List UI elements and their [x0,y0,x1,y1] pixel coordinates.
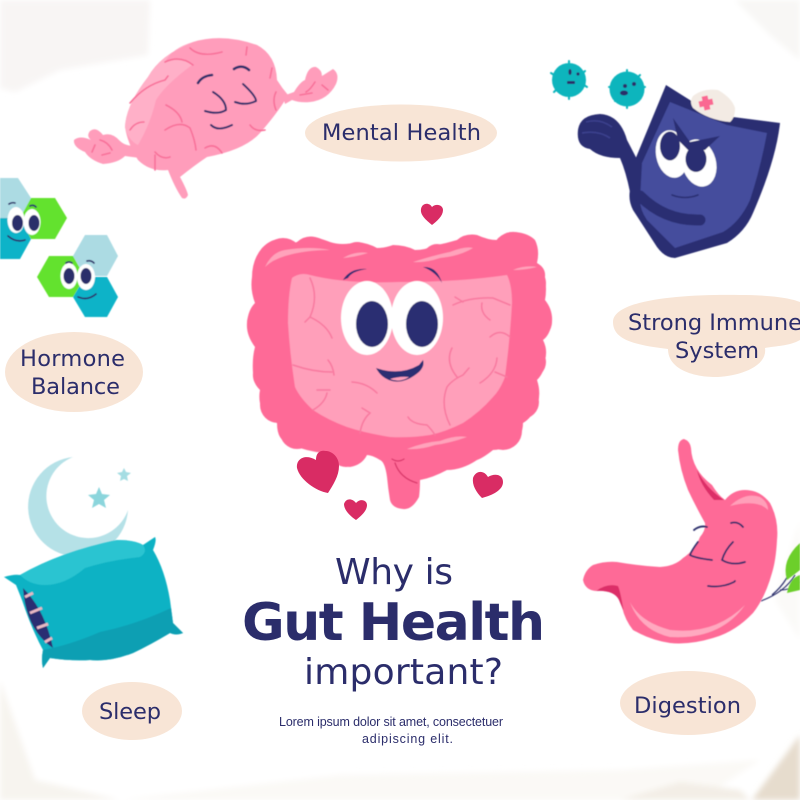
label pill: sleep [82,682,182,740]
mouth [376,360,424,382]
veins [293,278,510,435]
icon: hexagon character one [0,178,67,259]
label pill: digestion: Digestion [634,693,741,719]
label pill: hormone balance: Balance [31,374,120,400]
label pill: mental health: Mental Health [322,120,481,146]
icon: brain character [74,38,337,199]
label pill: strong immune system [613,295,800,377]
label pill: hormone balance: Hormone [20,346,125,372]
left hand [74,129,140,164]
label pill: digestion [620,671,756,735]
eyes [341,281,443,355]
central gut character [247,232,552,509]
icon: stomach character [583,439,777,643]
heart: right [473,472,503,498]
label pill: strong immune system: Strong Immune [628,310,800,336]
eyebrows [343,267,442,283]
title [242,552,545,693]
highlights [265,248,537,449]
icon: pillow [4,537,183,668]
panel: strong immune system [551,61,800,377]
title: Gut Health [242,593,545,653]
label pill: strong immune system: System [675,338,759,364]
label pill: hormone balance [5,332,143,412]
intestine body [247,232,552,509]
description text: Lorem ipsum dolor sit amet, consectetuer [279,715,503,729]
icon: shield character [578,85,780,258]
description text: adipiscing elit. [362,732,453,746]
icon: leaves [761,543,800,601]
title: Why is [335,552,453,593]
icon: crescent moon and stars [28,457,131,557]
panel: sleep [4,457,183,740]
pillow stripes [23,588,53,648]
heart: top [421,204,443,225]
label pill: mental health [305,104,497,162]
label pill: sleep: Sleep [99,699,161,725]
heart: bottom [344,499,367,520]
heart: large left [297,451,339,493]
title: important? [304,652,503,693]
inner lumen [288,274,512,437]
icon: hexagon character two [37,235,118,317]
panel: digestion [583,439,800,735]
description text [279,715,503,746]
icon: germs [551,61,645,108]
icon: nurse cap [691,90,735,122]
panel: hormone balance [0,178,143,412]
right hand [283,67,337,104]
panel: mental health [74,38,497,199]
